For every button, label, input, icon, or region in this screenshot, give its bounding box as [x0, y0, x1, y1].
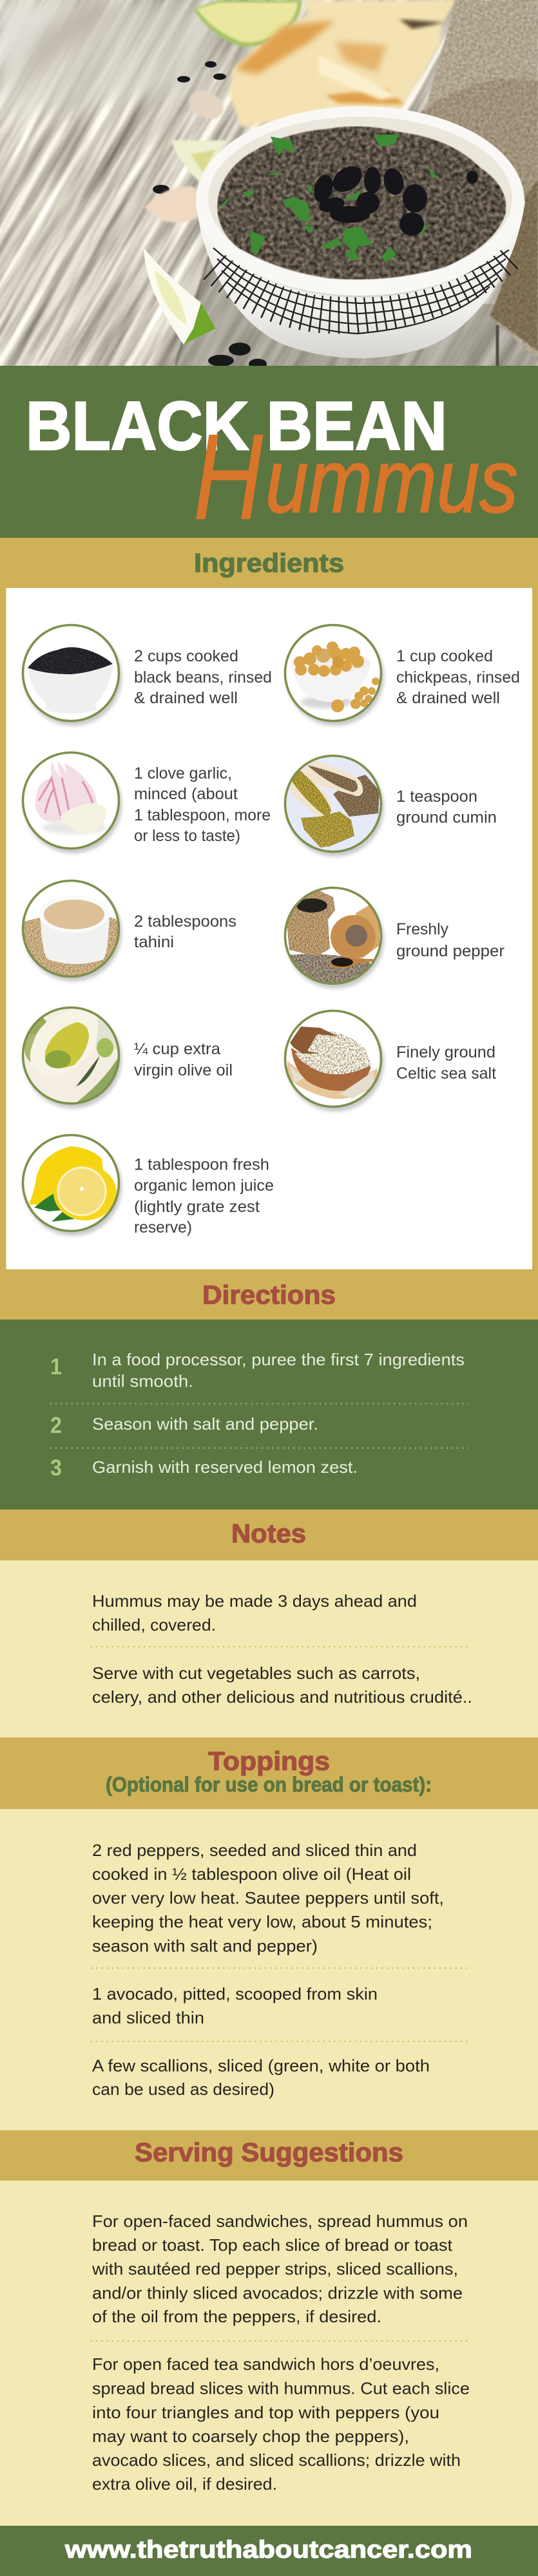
note: make ahead: Hummus may be made 3 days ahead and — [92, 1591, 417, 1611]
heading: Ingredients: Ingredients — [194, 548, 344, 578]
ingredient: lemon: reserve) — [134, 1218, 192, 1236]
suggestion: open-faced sandwiches — [91, 2211, 468, 2326]
title: Hummus script — [193, 409, 518, 545]
step 3: Garnish with reserved lemon zest. — [92, 1457, 358, 1477]
topping: red peppers — [92, 1841, 444, 1955]
ingredient: Celtic sea salt: Celtic sea salt — [396, 1065, 496, 1083]
ingredient: chickpeas: 1 cup cooked — [396, 647, 493, 665]
topping: red peppers: over very low heat. Sautee peppers until soft, — [92, 1888, 444, 1908]
suggestion: tea sandwiches: may want to coarsely chop the peppers), — [92, 2427, 409, 2446]
ingredient: ground pepper — [285, 887, 504, 989]
scattered black beans on the table — [153, 61, 267, 369]
topping: scallions — [92, 2056, 430, 2099]
ingredient: cumin: ground cumin — [396, 809, 497, 827]
topping: red peppers: season with salt and pepper) — [92, 1936, 318, 1955]
ingredient: olive oil: virgin olive oil — [134, 1061, 233, 1079]
heading: Directions: Directions — [202, 1280, 336, 1310]
topping: avocado: 1 avocado, pitted, scooped from skin — [92, 1984, 378, 2003]
note: make ahead: chilled, covered. — [92, 1615, 216, 1634]
footer: website: www.thetruthaboutcancer.com — [64, 2536, 472, 2563]
suggestion: tea sandwiches: into four triangles and top with peppers (you — [92, 2403, 439, 2422]
topping: red peppers: keeping the heat very low, about 5 minutes; — [92, 1912, 432, 1931]
panel: directions — [0, 1269, 538, 1510]
ingredient: cumin — [285, 755, 497, 857]
wood table background — [0, 0, 538, 366]
ingredient: tahini: 2 tablespoons — [134, 913, 236, 931]
white ceramic bowl — [196, 106, 525, 358]
ingredient: tahini: tahini — [134, 933, 174, 951]
suggestion: tea sandwiches: extra olive oil, if desired. — [92, 2474, 277, 2494]
hummus — [217, 126, 506, 279]
ingredient: black beans: & drained well — [134, 689, 238, 707]
ingredient: garlic: or less to taste) — [134, 827, 240, 845]
ingredient: ground pepper: ground pepper — [396, 942, 504, 960]
step 1: In a food processor, puree the first 7 ingredients — [92, 1350, 465, 1369]
topping: scallions: can be used as desired) — [92, 2079, 274, 2099]
note: serving — [92, 1663, 472, 1707]
suggestion: tea sandwiches: avocado slices, and sliced scallions; drizzle with — [92, 2450, 461, 2470]
ingredient: lemon: (lightly grate zest — [134, 1198, 260, 1216]
suggestion: open-faced sandwiches: For open-faced sandwiches, spread hummus on — [92, 2211, 468, 2231]
ingredient: garlic: minced (about — [134, 785, 238, 803]
ingredient: olive oil — [19, 1007, 233, 1108]
ingredient: cumin: 1 teaspoon — [396, 788, 477, 806]
step 1: 1 — [50, 1354, 62, 1379]
footer: website — [0, 2526, 538, 2576]
step 1: until smooth. — [92, 1372, 193, 1391]
panel: ingredients — [0, 538, 538, 1269]
topping: red peppers: cooked in ½ tablespoon olive oil (Heat oil — [92, 1864, 411, 1884]
step 3 — [50, 1455, 358, 1481]
ingredient: black beans: black beans, rinsed — [134, 668, 272, 687]
suggestion: open-faced sandwiches: and/or thinly sliced avocados; drizzle with some — [92, 2284, 463, 2303]
bowl grid pattern — [196, 201, 525, 334]
ingredient: garlic: 1 clove garlic, — [134, 764, 232, 782]
panel: serving suggestions — [0, 2130, 538, 2526]
step 2: 2 — [50, 1413, 62, 1438]
suggestion: tea sandwiches — [92, 2354, 470, 2494]
panel: notes — [0, 1510, 538, 1738]
lime wedge, top — [193, 0, 302, 47]
ingredient: garlic — [23, 752, 271, 853]
topping: red peppers: 2 red peppers, seeded and sliced thin and — [92, 1841, 417, 1860]
subheading: optional: (Optional for use on bread or toast): — [106, 1773, 432, 1796]
whole black beans on top — [311, 161, 478, 236]
title: BLACK BEAN: BLACK BEAN — [26, 387, 447, 464]
suggestion: open-faced sandwiches: with sautéed red pepper strips, sliced scallions, — [91, 2259, 458, 2278]
step 3: 3 — [50, 1455, 62, 1481]
ingredient: Celtic sea salt — [285, 1010, 496, 1112]
step 1 — [50, 1350, 465, 1391]
panel: toppings — [0, 1738, 538, 2130]
suggestion: tea sandwiches: spread bread slices with hummus. Cut each slice — [92, 2379, 470, 2398]
title band — [0, 366, 538, 545]
burlap cloth — [419, 0, 538, 361]
topping: scallions: A few scallions, sliced (green, white or both — [92, 2056, 430, 2075]
note: serving: Serve with cut vegetables such as carrots, — [92, 1663, 420, 1683]
step 2: Season with salt and pepper. — [92, 1414, 318, 1434]
suggestion: tea sandwiches: For open faced tea sandwich hors d’oeuvres, — [92, 2354, 439, 2374]
ingredient: Celtic sea salt: Finely ground — [396, 1043, 495, 1061]
ingredient: black beans — [23, 625, 272, 726]
note: serving: celery, and other delicious and nutritious crudité.. — [92, 1687, 472, 1707]
heading: Notes: Notes — [231, 1519, 306, 1548]
ingredient: ground pepper: Freshly — [396, 920, 448, 938]
topping: avocado — [92, 1984, 378, 2027]
lime wedges, left — [144, 140, 227, 345]
heading: Serving Suggestions: Serving Suggestions — [135, 2137, 403, 2167]
step 2 — [50, 1413, 318, 1438]
hero photo: black bean hummus in a bowl on rustic wood — [0, 0, 538, 366]
ingredient: black beans: 2 cups cooked — [134, 647, 238, 665]
title: Hummus script: H — [193, 409, 264, 545]
ingredient: tahini — [22, 880, 236, 981]
ingredient: garlic: 1 tablespoon, more — [134, 806, 271, 824]
topping: avocado: and sliced thin — [92, 2008, 204, 2027]
garlic cloves — [144, 86, 228, 223]
suggestion: open-faced sandwiches: bread or toast. Top each slice of bread or toast — [92, 2235, 453, 2255]
ingredient: lemon: organic lemon juice — [134, 1177, 274, 1195]
note: make ahead — [92, 1591, 417, 1634]
ingredient: olive oil: ¼ cup extra — [134, 1040, 220, 1058]
ingredient: chickpeas — [285, 625, 520, 726]
parsley leaves — [218, 134, 438, 263]
suggestion: open-faced sandwiches: of the oil from the peppers, if desired. — [92, 2307, 381, 2326]
ingredient: lemon: 1 tablespoon fresh — [134, 1155, 269, 1173]
flatbread pieces — [229, 0, 456, 128]
ingredient: chickpeas: chickpeas, rinsed — [396, 668, 520, 687]
ingredient: lemon — [23, 1135, 274, 1236]
ingredient: chickpeas: & drained well — [396, 689, 500, 707]
heading: Toppings: Toppings — [208, 1747, 330, 1776]
